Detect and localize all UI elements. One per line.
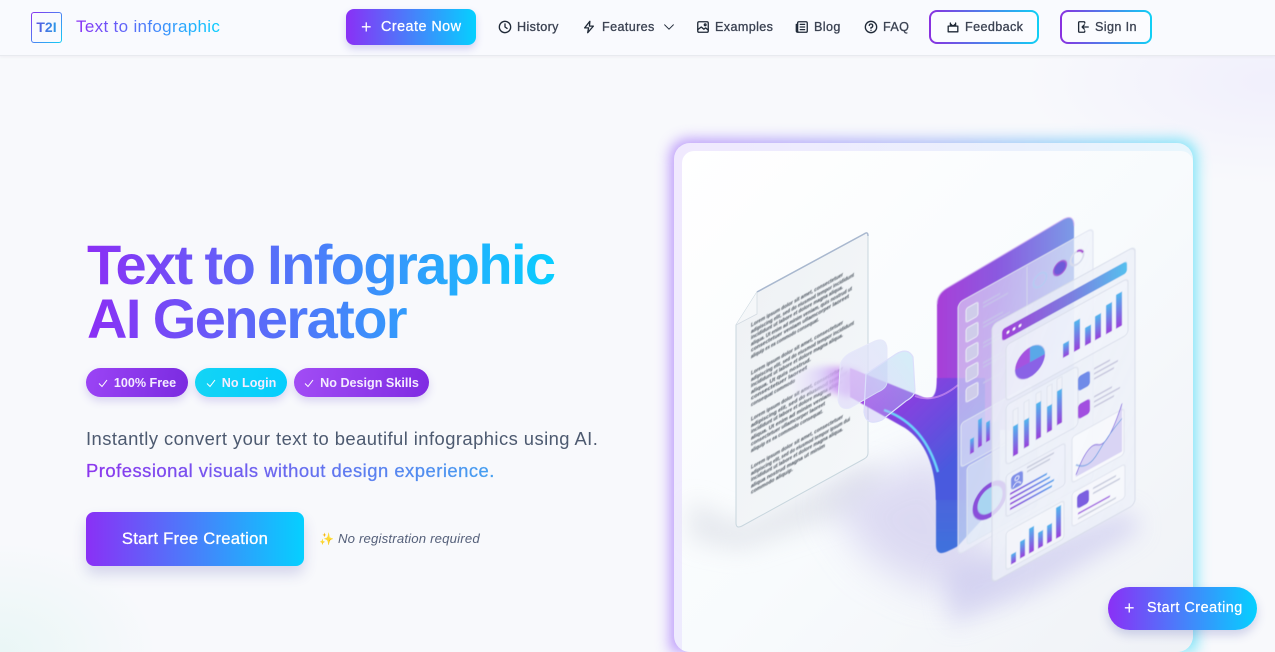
lorem ipsum text blocks: aliqua. Ut enim ad minim veniam (751, 392, 831, 442)
donut card (967, 428, 1037, 545)
illustration backdrop (682, 151, 1193, 652)
logo icon: T2I (36, 19, 57, 35)
icon tiles (966, 302, 978, 403)
nav item: features: Features (602, 20, 655, 34)
lorem ipsum text blocks: incididunt ut labore et dolore magna aliqua. (751, 427, 843, 483)
mini bar card (961, 384, 1031, 467)
background glow: top right (1020, 56, 1275, 186)
lorem ipsum text blocks: Lorem ipsum dolor sit amet, consectetuer (751, 320, 843, 377)
navigation bar (0, 0, 1275, 56)
floating start creating button: + (1124, 598, 1135, 618)
header bar (1002, 261, 1127, 342)
stacked bars card (1006, 366, 1078, 465)
line chart card (1072, 408, 1124, 483)
lorem ipsum text blocks: consectetuer laoreet (751, 365, 807, 402)
nav item: examples: Examples (715, 20, 773, 34)
lorem ipsum text blocks (751, 266, 854, 496)
lorem ipsum text blocks: aliqua. Ut enim ad minim veniam, quis nostrud ut (751, 286, 852, 348)
hero heading (87, 238, 557, 346)
feedback button (929, 10, 1039, 44)
side legend (1078, 370, 1090, 392)
create now button: Create Now (381, 19, 461, 35)
text lines (983, 288, 1010, 383)
nav item: blog (796, 20, 841, 34)
glass ring 1 (838, 340, 887, 409)
lorem ipsum text blocks: commodo aliquip. (751, 467, 793, 496)
feedback button: Feedback (965, 20, 1023, 34)
sign in button: Sign In (1095, 20, 1137, 34)
nav item: FAQ: FAQ (883, 20, 909, 34)
primary call to action (86, 512, 304, 566)
gradient tagline: Professional visuals without design experience. (86, 460, 495, 481)
badge: no design skills (294, 368, 429, 397)
lorem ipsum text blocks: Lorem ipsum dolor sit amet, consectetuer (751, 366, 843, 423)
back purple panel with stem (936, 218, 1074, 553)
floor shadows and reflections (690, 450, 1140, 625)
badge: 100% free (86, 368, 188, 397)
source document sheet (736, 233, 868, 527)
glass ring 2 (864, 351, 915, 422)
logo icon (31, 12, 62, 43)
lorem ipsum text blocks: consectetuer ullamcorper laoreet (751, 401, 825, 448)
create now button (346, 9, 476, 45)
badge: 100% free: 100% Free (114, 376, 176, 390)
badge row (83, 368, 432, 404)
create now button: + (361, 17, 372, 37)
chart card with pie and bars (1006, 278, 1128, 401)
primary call to action: Start Free Creation (122, 529, 268, 548)
nav item: features (584, 20, 674, 34)
lorem ipsum text blocks: aliquip ex ea commodo consequat. (751, 317, 819, 360)
lorem ipsum text blocks: adipiscing elit, sed do eiusmod tempor incididunt (751, 272, 854, 335)
connector pipe (785, 340, 985, 500)
nav item: FAQ (864, 20, 909, 34)
lorem ipsum text blocks: adipiscing elit, sed do eiusmod tempor ipsum dui (751, 416, 850, 477)
hero heading: Text to Infographic (87, 233, 554, 296)
hero heading: AI Generator (87, 287, 406, 350)
lorem ipsum text blocks: incididunt ut labore et dolore magna aliqua. (751, 379, 843, 435)
lorem ipsum text blocks: adipiscing elit, sed do eiusmod tempor incididunt (751, 320, 854, 383)
brand name: Text to infographic (76, 17, 220, 36)
lorem ipsum text blocks: consectetuer veniam ullamcorper laoreet (751, 294, 849, 354)
rings (1034, 270, 1046, 290)
hero illustration card (674, 143, 1193, 652)
lorem ipsum text blocks: incididunt ut labore et dolore magna aliqua. (751, 285, 843, 341)
middle glass panel (958, 228, 1093, 555)
sign in button (1060, 10, 1152, 44)
nav item: history: History (517, 20, 559, 34)
nav item: blog: Blog (814, 20, 841, 34)
lorem ipsum text blocks: Lorem ipsum dolor sit amet, consectetuer (751, 272, 843, 329)
floating start creating button (1108, 587, 1257, 630)
lorem ipsum text blocks: aliqua. Ut quis nostrud. (751, 357, 812, 396)
floating start creating button: Start Creating (1147, 600, 1243, 616)
lorem ipsum text blocks: aliqua nostrud magna ut minim (751, 443, 825, 490)
badge: no login: No Login (222, 376, 276, 390)
badge: no login (195, 368, 287, 397)
no registration note: ✨ No registration required (319, 531, 480, 546)
nav item: history (498, 20, 559, 34)
lorem ipsum text blocks: aliquip ex ea commodo consequat. (751, 409, 823, 454)
lorem ipsum text blocks: adipiscing elit, sed do eiusmod tempor (751, 370, 847, 429)
badge: no design skills: No Design Skills (320, 376, 419, 390)
subheading: Instantly convert your text to beautiful infographics using AI. (86, 428, 598, 449)
small bars card (1006, 500, 1064, 570)
front glass panel (992, 246, 1135, 583)
person card (1006, 443, 1065, 517)
lorem ipsum text blocks: incididunt ut labore et dolore magna aliqua. (751, 333, 843, 389)
app card (1072, 464, 1125, 527)
background glow: bottom left (0, 540, 160, 652)
lorem ipsum text blocks: Lorem ipsum dolor sit amet, consectetuer (751, 414, 843, 471)
illustration glow (670, 139, 1197, 652)
lorem ipsum text blocks: consequat commodo (751, 378, 796, 408)
